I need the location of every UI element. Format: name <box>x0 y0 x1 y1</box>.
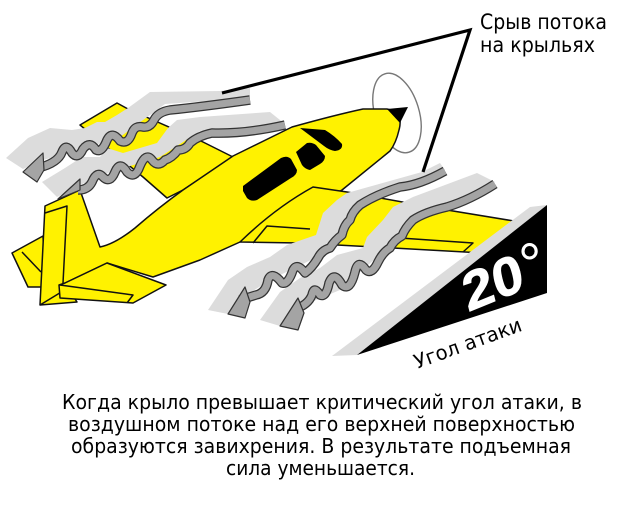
label: angle of attack: Угол атаки <box>411 312 525 374</box>
arrow 1 outline <box>38 100 250 168</box>
wedge black <box>357 205 547 355</box>
leader lines <box>222 30 470 172</box>
horizontal stabilizer <box>59 263 166 303</box>
arrow 1 head <box>23 153 44 182</box>
arrow 3 head <box>228 287 250 318</box>
airplane <box>12 103 520 305</box>
near wing flap <box>253 226 310 243</box>
angle wedge <box>332 205 547 356</box>
icon: propeller disc <box>364 67 430 159</box>
left stabilizer <box>12 236 45 287</box>
band 1 <box>6 88 250 169</box>
fuselage and fin <box>40 109 400 305</box>
caption line 4: сила уменьшается. <box>226 456 415 480</box>
fin rudder <box>40 206 67 305</box>
near wing aileron <box>400 238 473 252</box>
caption <box>62 390 582 480</box>
airflow arrows <box>23 100 495 330</box>
band 4 <box>260 173 495 326</box>
degree sign: ° <box>518 232 541 297</box>
arrow 2 outline <box>78 125 285 190</box>
arrow 1 fill <box>38 100 250 168</box>
arrow 4 outline <box>295 184 495 309</box>
light turbulence bands <box>6 88 495 326</box>
near wing <box>240 187 520 253</box>
band 2 <box>42 112 285 197</box>
wedge light edge <box>332 205 547 356</box>
far wing <box>80 103 233 198</box>
arrow 4 fill <box>295 184 495 309</box>
cockpit rear window <box>243 157 297 201</box>
arrow 3 fill <box>240 171 445 300</box>
label line 1: Срыв потока <box>480 10 607 34</box>
arrow 4 head <box>280 298 304 330</box>
icon: spinner <box>387 107 408 123</box>
angle value: 20 <box>457 243 529 324</box>
caption line 2: воздушном потоке над его верхней поверхностью <box>68 412 575 436</box>
windshield stripe <box>300 128 342 151</box>
label line 2: на крыльях <box>480 33 595 57</box>
band 3 <box>208 163 445 314</box>
arrow 2 fill <box>78 125 285 190</box>
caption line 3: образуются завихрения. В результате подъемная <box>71 434 571 458</box>
cockpit front window <box>296 143 325 170</box>
arrow 2 head <box>58 179 80 199</box>
label: wing stall <box>480 10 607 57</box>
caption line 1: Когда крыло превышает критический угол атаки, в <box>62 390 582 414</box>
arrow 3 outline <box>240 171 445 300</box>
